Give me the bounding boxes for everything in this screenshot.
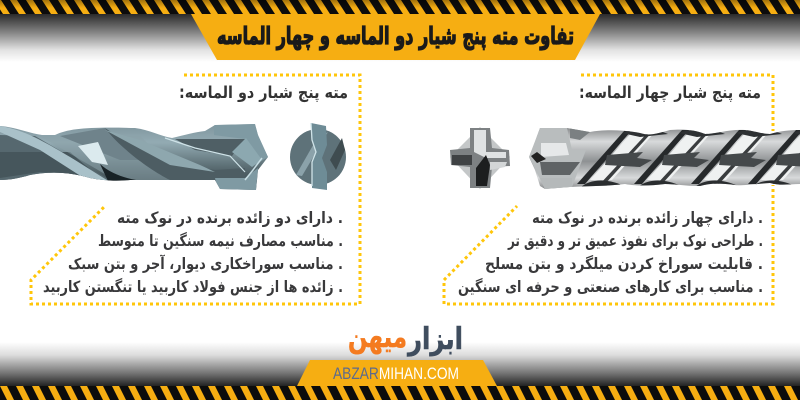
title text: تفاوت مته پنج شیار دو الماسه و چهار الماسه (217, 22, 574, 50)
bullet list left panel: . زائده ها از جنس فولاد کاربید یا تنگستن کاربید (43, 277, 343, 296)
drill bit two-cutter end view (290, 123, 346, 190)
logo: میهن (348, 320, 407, 355)
bullet list right panel (458, 209, 763, 296)
bullet list left panel: . دارای دو زائده برنده در نوک مته (117, 209, 343, 227)
dotted frame right panel (444, 75, 773, 304)
top background gradient band (0, 14, 800, 62)
bottom background gradient band (0, 342, 800, 386)
panel: four-diamond bit (444, 75, 800, 304)
bullet list right panel: . قابلیت سوراخ کردن میلگرد و بتن مسلح (485, 254, 763, 273)
bullet list left panel: . مناسب سوراخکاری دیوار، آجر و بتن سبک (68, 254, 343, 273)
drill bit four-cutter side view (525, 125, 800, 191)
bottom hazard stripes (0, 386, 800, 400)
heading right panel: مته پنج شیار چهار الماسه: (579, 83, 761, 103)
title banner (191, 14, 600, 60)
logo (348, 320, 463, 357)
heading left panel: مته پنج شیار دو الماسه: (179, 83, 348, 103)
spiral flutes (577, 129, 668, 188)
dotted frame left panel (31, 75, 360, 304)
top hazard stripes (0, 0, 800, 14)
bullet list left panel (43, 209, 343, 296)
bullet list right panel: . دارای چهار زائده برنده در نوک مته (532, 209, 763, 228)
website banner (297, 360, 497, 386)
drill bit four-cutter end view (450, 127, 510, 189)
drill bit two-cutter side view (0, 124, 268, 190)
logo: ابزار (406, 322, 463, 357)
bullet list left panel: . مناسب مصارف نیمه سنگین تا متوسط (98, 231, 343, 250)
panel: two-diamond bit (0, 75, 360, 304)
website url: ABZARMIHAN.COM (333, 365, 459, 383)
